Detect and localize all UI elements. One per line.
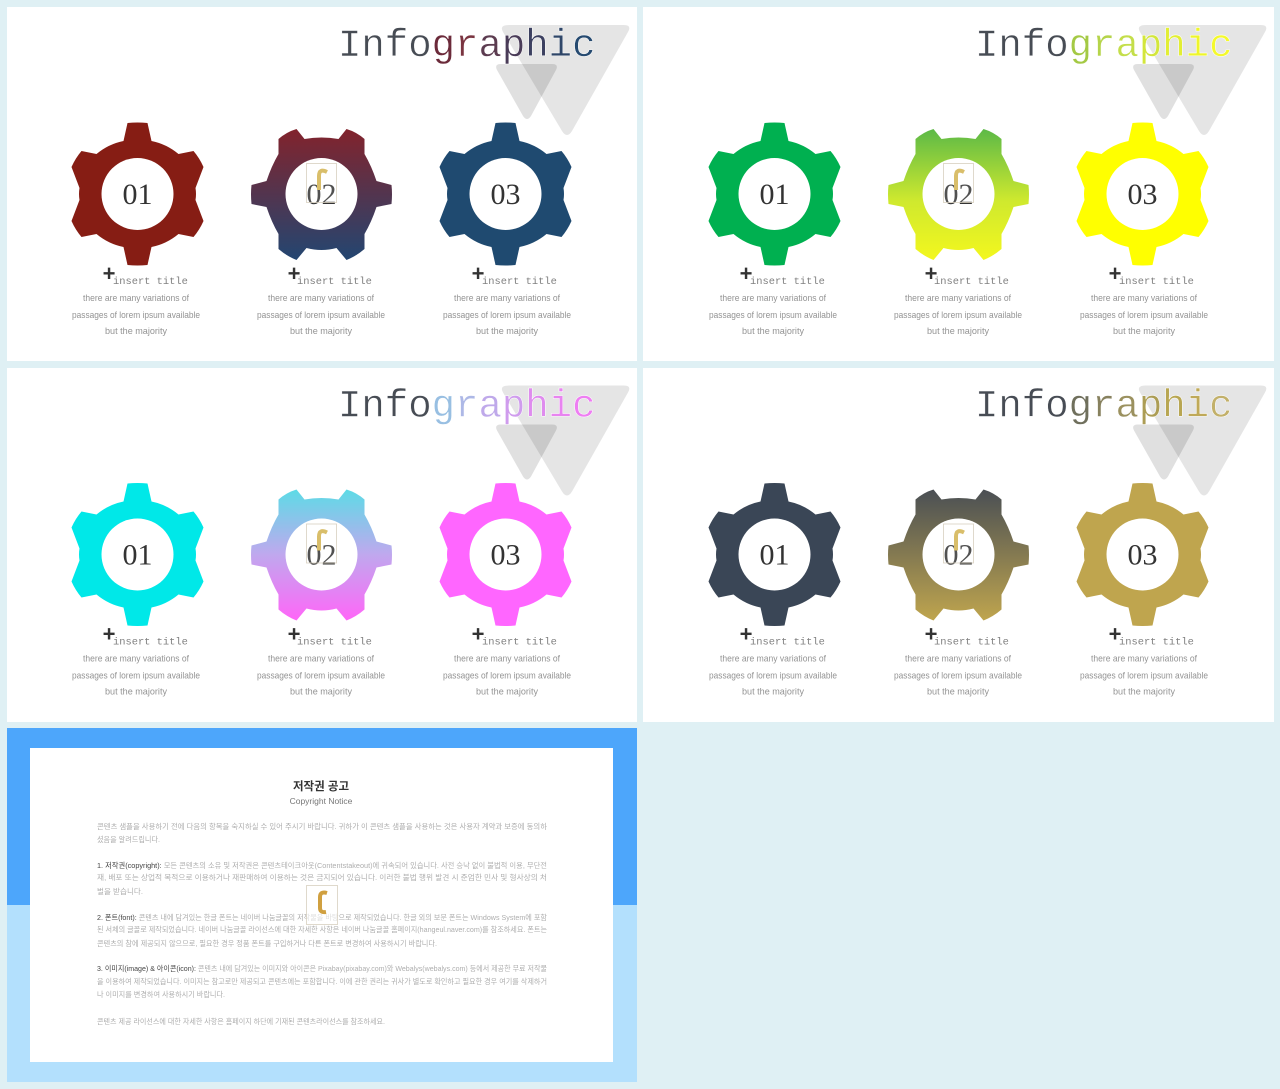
panel: infographic green and yellow <box>643 7 1274 361</box>
gear 02: 02 <box>944 178 974 211</box>
heading: copyright: 저작권 공고 <box>293 779 349 793</box>
gear 01 <box>72 483 204 626</box>
gear 03 <box>440 483 572 626</box>
column 01 text: there are many variations of <box>83 654 189 664</box>
column 01 text <box>72 261 200 337</box>
column 02 text <box>257 261 385 337</box>
column 03 text: passages of lorem ipsum available <box>443 670 571 682</box>
column 02 text: + <box>288 622 300 646</box>
column 03 text: + <box>472 622 484 646</box>
column 02 text: there are many variations of <box>268 293 374 304</box>
column 03 text: + <box>1109 261 1121 286</box>
gear 03 <box>1076 122 1208 266</box>
section 1: 재, 배포 또는 상업적 목적으로 이용하거나 재판매하여 이용하는 것은 금지되어 있습니다. 이러한 불법 행위 발견 시 준엄한 민사 및 형사상의 처 <box>97 872 547 882</box>
column 02 text: passages of lorem ipsum available <box>894 310 1022 321</box>
icon: background triangles <box>1133 25 1266 135</box>
gear 01: 01 <box>122 178 152 211</box>
column 02 text: there are many variations of <box>268 654 374 664</box>
intro paragraph <box>97 821 547 844</box>
column 03 text: there are many variations of <box>1091 293 1197 304</box>
gear 02: 02 <box>306 538 336 572</box>
icon: background triangles <box>496 386 629 496</box>
section 2: 된 서체의 글꼴로 제작되었습니다. 네이버 나눔글꼴 라이선스에 대한 자세한 사항은 네이버 나눔글꼴 홈페이지(hangeul.naver.com)를 참조하세요. 폰트는 <box>97 924 547 934</box>
column 03 text: there are many variations of <box>1091 654 1197 664</box>
column 03 text: there are many variations of <box>454 293 560 304</box>
column 02 text <box>894 622 1022 698</box>
column 03 text: + <box>472 261 484 286</box>
gear 02: 02 <box>306 178 336 211</box>
column 03 text <box>443 622 571 698</box>
section 3 <box>97 963 547 999</box>
column 01 text: insert title <box>750 276 825 288</box>
column 01 text: insert title <box>750 636 825 648</box>
section 3: 을 이용하여 제작되었습니다. 이미지는 참고로만 제공되고 콘텐츠에는 포함합니다. 이에 관한 권리는 귀사가 별도로 확인하고 필요한 경우 여기를 삭제하거 <box>97 976 547 986</box>
column 02 text: but the majority <box>290 326 352 337</box>
column 02 text: passages of lorem ipsum available <box>894 670 1022 682</box>
gear 01 <box>708 122 840 266</box>
column 03 text: but the majority <box>1113 326 1175 337</box>
column 01 text: there are many variations of <box>720 654 826 664</box>
gear 01: 01 <box>122 538 152 572</box>
gear 03 <box>1076 483 1208 626</box>
icon: background triangles <box>1133 386 1266 496</box>
column 03 text: passages of lorem ipsum available <box>1080 310 1208 321</box>
column 02 text: + <box>925 622 937 646</box>
column 03 text: + <box>1109 622 1121 646</box>
gear 02 <box>251 490 392 620</box>
column 03 text: insert title <box>482 636 557 648</box>
title: Infographic <box>975 24 1232 68</box>
column 01 text: insert title <box>113 636 188 648</box>
column 02 text <box>894 261 1022 337</box>
panel: infographic red and navy <box>7 7 637 361</box>
column 03 text: insert title <box>482 276 557 288</box>
section 1: 벌을 받습니다. <box>97 886 143 896</box>
column 03 text: there are many variations of <box>454 654 560 664</box>
watermark icon <box>944 524 974 563</box>
column 01 text <box>72 622 200 698</box>
column 03 text: but the majority <box>1113 686 1175 698</box>
gear 02 <box>888 490 1029 620</box>
watermark icon <box>944 164 974 202</box>
section 3: 3. 이미지(image) & 아이콘(icon): 콘텐츠 내에 담겨있는 이미지와 아이콘은 Pixabay(pixabay.com)와 Webalys(webalys.com) 등에서 제공한 무료 저작물 <box>97 963 547 973</box>
column 01 text: + <box>740 261 752 286</box>
column 01 text: there are many variations of <box>83 293 189 304</box>
panel: infographic slate and gold <box>643 368 1274 722</box>
column 02 text: there are many variations of <box>905 293 1011 304</box>
column 03 text <box>1080 261 1208 337</box>
column 01 text: there are many variations of <box>720 293 826 304</box>
watermark icon <box>306 164 336 202</box>
watermark icon <box>306 524 336 563</box>
column 01 text: but the majority <box>105 686 167 698</box>
gear 03: 03 <box>490 538 520 572</box>
section 2: 콘텐츠의 참에 제공되지 않으므로, 필요한 경우 정품 폰트를 구입하거나 다른 폰트로 변경하여 사용하시기 바랍니다. <box>97 938 437 948</box>
title: Infographic <box>975 384 1232 428</box>
gear 03: 03 <box>490 178 520 211</box>
column 01 text <box>709 261 837 337</box>
section 2 <box>97 912 547 948</box>
intro paragraph: 셨음을 알려드립니다. <box>97 834 160 844</box>
column 03 text <box>443 261 571 337</box>
gear 01: 01 <box>760 538 790 572</box>
column 01 text: + <box>103 622 115 646</box>
column 02 text <box>257 622 385 698</box>
column 01 text: passages of lorem ipsum available <box>72 310 200 321</box>
section 3: 나 이미지를 변경하여 사용하시기 바랍니다. <box>97 989 225 999</box>
column 02 text: insert title <box>934 636 1009 648</box>
intro paragraph: 콘텐츠 샘플을 사용하기 전에 다음의 항목을 숙지하실 수 있어 주시기 바랍니다. 귀하가 이 콘텐츠 샘플을 사용하는 것은 사용자 계약과 보증에 동의하 <box>97 821 547 831</box>
title: Infographic <box>338 384 595 428</box>
column 02 text: but the majority <box>927 686 989 698</box>
gear 01 <box>72 122 204 266</box>
column 01 text <box>709 622 837 698</box>
column 03 text: but the majority <box>476 686 538 698</box>
column 03 text: but the majority <box>476 326 538 337</box>
watermark icon <box>306 886 338 924</box>
column 01 text: but the majority <box>105 326 167 337</box>
section 1 <box>97 860 547 896</box>
column 01 text: + <box>740 622 752 646</box>
column 02 text: passages of lorem ipsum available <box>257 670 385 682</box>
column 02 text: + <box>925 261 937 286</box>
gear 02 <box>251 129 392 260</box>
column 02 text: but the majority <box>927 326 989 337</box>
column 01 text: insert title <box>113 276 188 288</box>
column 01 text: but the majority <box>742 686 804 698</box>
column 03 text <box>1080 622 1208 698</box>
column 02 text: but the majority <box>290 686 352 698</box>
closing note: 콘텐츠 제공 라이선스에 대한 자세한 사항은 홈페이지 하단에 기재된 콘텐츠라이선스를 참조하세요. <box>97 1016 385 1026</box>
gear 02: 02 <box>944 538 974 572</box>
column 02 text: passages of lorem ipsum available <box>257 310 385 321</box>
column 02 text: insert title <box>297 276 372 288</box>
gear 01 <box>708 483 840 626</box>
column 01 text: but the majority <box>742 326 804 337</box>
column 03 text: passages of lorem ipsum available <box>1080 670 1208 682</box>
column 01 text: passages of lorem ipsum available <box>709 310 837 321</box>
gear 01: 01 <box>760 178 790 211</box>
icon: background triangles <box>496 25 629 135</box>
subheading: Copyright Notice <box>290 796 353 806</box>
column 03 text: insert title <box>1119 636 1194 648</box>
gear 02 <box>888 129 1029 260</box>
column 03 text: insert title <box>1119 276 1194 288</box>
column 01 text: passages of lorem ipsum available <box>709 670 837 682</box>
gear 03: 03 <box>1128 538 1158 572</box>
section 1: 1. 저작권(copyright): 모든 콘텐츠의 소유 및 저작권은 콘텐츠테이크아웃(Contentstakeout)에 귀속되어 있습니다. 사전 승낙 없이 불법적 이용, 무단전 <box>97 860 547 870</box>
column 02 text: insert title <box>297 636 372 648</box>
column 01 text: passages of lorem ipsum available <box>72 670 200 682</box>
title: Infographic <box>338 24 595 68</box>
gear 03: 03 <box>1128 178 1158 211</box>
column 02 text: there are many variations of <box>905 654 1011 664</box>
gear 03 <box>440 122 572 266</box>
column 02 text: insert title <box>934 276 1009 288</box>
panel: copyright notice <box>7 728 637 1082</box>
column 01 text: + <box>103 261 115 286</box>
column 03 text: passages of lorem ipsum available <box>443 310 571 321</box>
section 2: 2. 폰트(font): 콘텐츠 내에 담겨있는 한글 폰트는 네이버 나눔글꼴의 저작물을 바탕으로 제작되었습니다. 한글 외의 보문 폰트는 Windows System에 포함 <box>97 912 547 922</box>
column 02 text: + <box>288 261 300 286</box>
panel: infographic cyan and magenta <box>7 368 637 722</box>
